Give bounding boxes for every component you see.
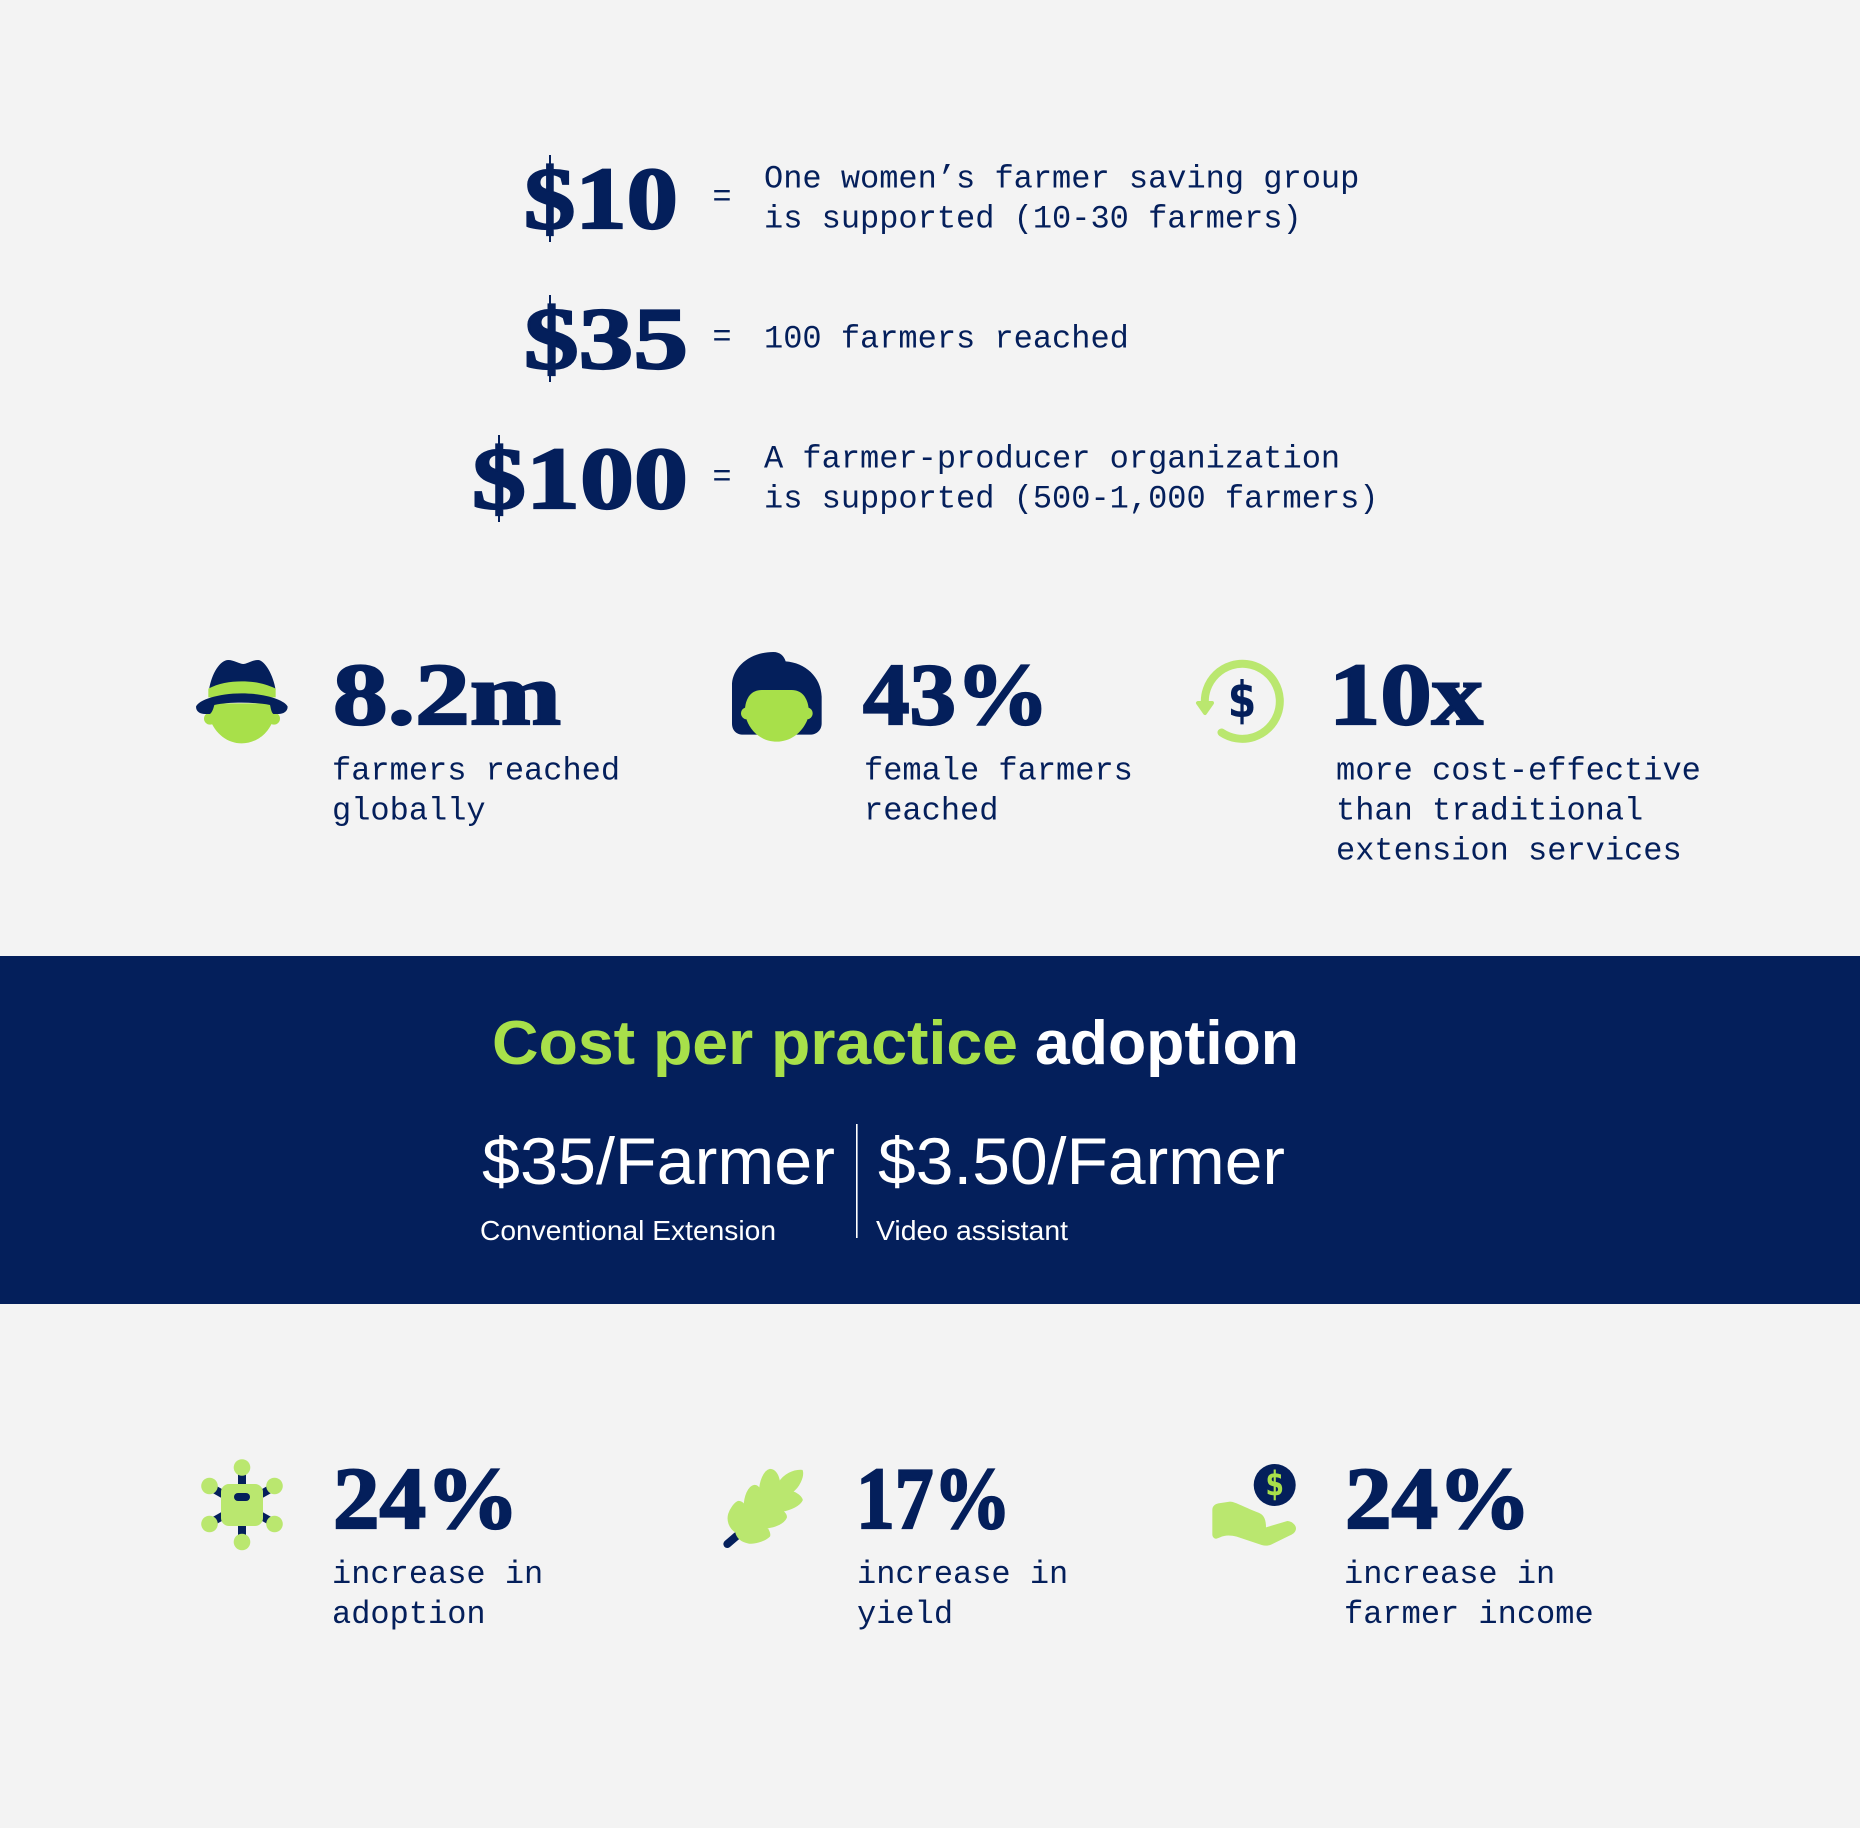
stat: farmers reached: 8.2m <box>333 647 561 744</box>
heading: cost per practice adoption: adoption <box>1035 1009 1299 1078</box>
stat: female farmers: female farmers <box>864 752 1133 790</box>
row: $10: $10 <box>524 151 678 248</box>
row: $35: $35 <box>524 291 688 388</box>
stat: income increase: farmer income <box>1344 1596 1594 1633</box>
row: $10: = <box>712 179 732 216</box>
row: $10: One women’s farmer saving group <box>764 160 1359 198</box>
stat: adoption increase <box>201 1451 543 1633</box>
panel: donation equivalents <box>472 151 1378 528</box>
row: $100 <box>472 431 1378 528</box>
row: $35: = <box>712 319 732 356</box>
stat: female farmers: 43% <box>863 647 1049 744</box>
stat: farmers reached: farmers reached <box>332 752 620 790</box>
row: $100: $100 <box>472 431 688 528</box>
stat: cost effectiveness: than traditional <box>1336 792 1643 830</box>
stat: income increase <box>1212 1451 1594 1633</box>
icon: hand with coin: $ <box>1265 1465 1284 1504</box>
metric: conventional extension: $35/Farmer <box>482 1124 835 1198</box>
row: $35: 100 farmers reached <box>764 320 1129 358</box>
icon: circular arrow with dollar: $ <box>1228 671 1256 729</box>
stat: cost effectiveness <box>1198 647 1701 870</box>
stat: yield increase: yield <box>857 1596 953 1633</box>
stat: adoption increase: adoption <box>332 1596 486 1633</box>
stat: yield increase: increase in <box>857 1556 1068 1593</box>
metric: video assistant: $3.50/Farmer <box>878 1124 1285 1198</box>
row: $10: is supported (10-30 farmers) <box>764 200 1302 238</box>
metric: conventional extension <box>480 1124 835 1246</box>
row: $35 <box>524 291 1129 388</box>
panel: impact statistics <box>201 1451 1594 1633</box>
row: $100: = <box>712 459 732 496</box>
metric: video assistant: Video assistant <box>876 1215 1068 1246</box>
icon: leaf <box>727 1470 802 1544</box>
stat: farmers reached: globally <box>332 792 486 830</box>
stat: cost effectiveness: 10x <box>1329 647 1483 744</box>
stat: cost effectiveness: more cost-effective <box>1336 752 1701 790</box>
stat: adoption increase: 24% <box>333 1451 519 1548</box>
stat: female farmers <box>732 647 1133 830</box>
icon: network node <box>201 1459 283 1550</box>
panel: reach statistics <box>196 647 1701 870</box>
icon: circular arrow with dollar <box>1198 664 1280 739</box>
stat: income increase: 24% <box>1345 1451 1531 1548</box>
row: $10 <box>524 151 1359 248</box>
metric: video assistant <box>876 1124 1285 1246</box>
icon: farmer with hat <box>196 660 288 743</box>
metric: conventional extension: Conventional Extension <box>480 1215 776 1246</box>
stat: income increase: increase in <box>1344 1556 1555 1593</box>
stat: farmers reached <box>196 647 620 830</box>
stat: yield increase: 17% <box>856 1451 1011 1548</box>
heading: cost per practice adoption <box>492 1009 1299 1078</box>
stat: yield increase <box>727 1451 1068 1633</box>
row: $100: A farmer-producer organization <box>764 440 1340 478</box>
stat: female farmers: reached <box>864 792 998 830</box>
stat: adoption increase: increase in <box>332 1556 543 1593</box>
row: $100: is supported (500-1,000 farmers) <box>764 480 1378 518</box>
stat: cost effectiveness: extension services <box>1336 832 1682 870</box>
icon: hand with coin <box>1212 1464 1296 1546</box>
icon: woman farmer <box>732 652 822 742</box>
panel: cost per practice adoption band <box>0 956 1860 1304</box>
heading: cost per practice adoption: Cost per practice <box>492 1009 1018 1078</box>
